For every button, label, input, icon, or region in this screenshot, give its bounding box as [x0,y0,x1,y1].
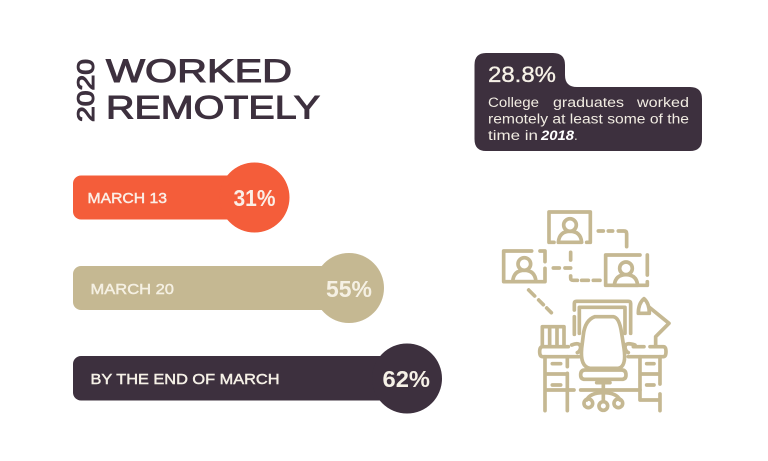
callout text: . [574,128,578,143]
callout background [474,53,702,151]
bar shape [73,344,442,414]
title: 2020 worked remotely [73,53,320,126]
desk lamp [638,299,669,347]
video call window: top [549,212,590,242]
bar value: 55% [326,276,372,302]
callout text: time in [488,128,538,143]
bar value: 62% [382,366,430,392]
bar label: MARCH 20 [90,282,174,298]
video call window: left [504,251,545,282]
video call window: right [606,255,647,285]
icon: remote worker at desk with video calls [504,212,669,411]
books on desk [542,327,564,345]
callout text: 2018 [540,128,575,143]
bar shape [73,162,290,232]
year label, rotated: 2020 [73,59,100,122]
callout text: graduates [553,95,624,110]
desk with drawers [540,347,666,411]
callout text: worked [636,95,689,110]
bar label: BY THE END OF MARCH [90,372,280,388]
callout: college graduates stat [474,53,702,151]
bar label: MARCH 13 [88,191,167,207]
callout text [488,95,689,143]
callout figure: 28.8% [488,62,556,87]
bar: March 20, 55% [73,253,384,323]
dashed connectors [529,231,627,313]
heading line 2: REMOTELY [106,90,320,126]
bar: by the end of March, 62% [73,344,442,414]
heading line 1: WORKED [106,53,292,89]
office chair [572,301,635,410]
callout text: College [488,95,539,110]
bar shape [73,253,384,323]
bar: March 13, 31% [73,162,290,232]
callout text: remotely at least some of the [488,112,689,126]
bar value: 31% [234,185,276,211]
